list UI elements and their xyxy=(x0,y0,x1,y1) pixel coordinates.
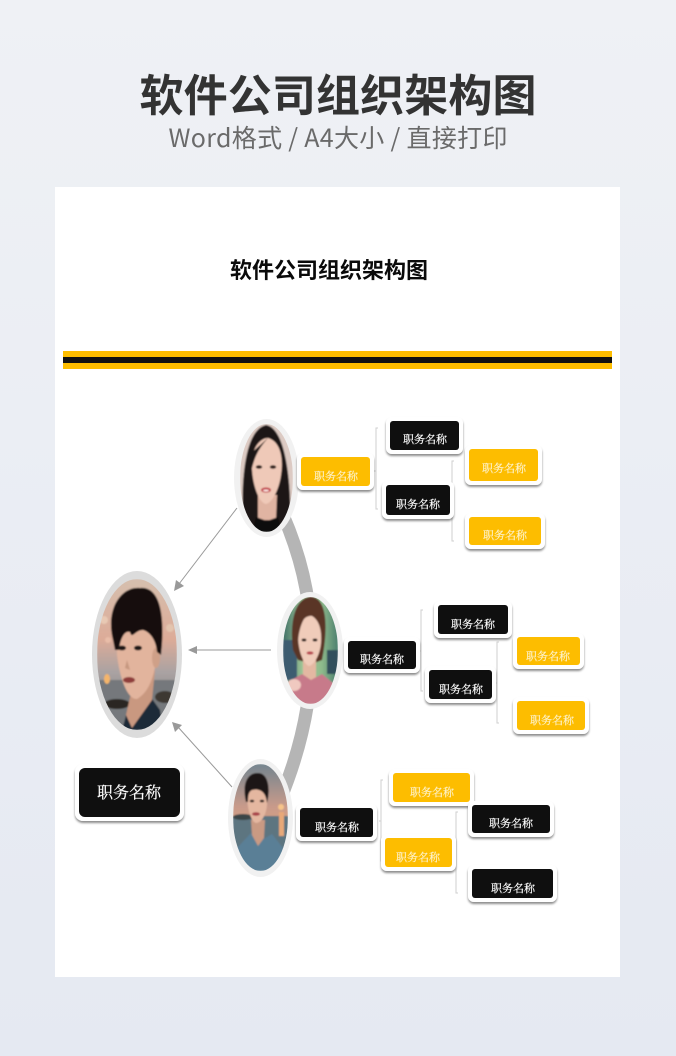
middle black box 2: 职务名称 xyxy=(439,682,484,696)
middle yellow box 1 xyxy=(513,633,584,669)
middle black box 1 xyxy=(434,601,512,638)
branch connector: bottom xyxy=(379,780,458,893)
top yellow box 1 xyxy=(465,445,542,485)
bottom yellow box 1: 职务名称 xyxy=(410,785,455,799)
portrait: lead xyxy=(92,571,182,738)
branch connector: middle xyxy=(419,610,499,723)
top yellow box 2 xyxy=(465,513,545,549)
subtitle: Word格式 / A4大小 / 直接打印 xyxy=(168,119,508,155)
bottom yellow box 1 xyxy=(389,769,474,806)
middle black box 2 xyxy=(425,666,496,703)
branch connector: top xyxy=(374,428,454,541)
bottom yellow box 2: 职务名称 xyxy=(396,850,441,864)
bottom black box 1: 职务名称 xyxy=(489,816,534,830)
middle main box: 职务名称 xyxy=(360,652,405,666)
bottom main box xyxy=(296,804,377,841)
top yellow box 1: 职务名称 xyxy=(482,461,527,475)
portrait: top person xyxy=(234,419,299,537)
document heading: 软件公司组织架构图 xyxy=(230,258,428,283)
portrait: middle person xyxy=(277,592,343,709)
top branch boxes xyxy=(297,417,545,549)
bottom black box 2 xyxy=(468,865,557,902)
middle yellow box 2: 职务名称 xyxy=(530,713,575,727)
arrow: middle person to lead xyxy=(188,646,271,654)
middle yellow box 1: 职务名称 xyxy=(526,649,571,663)
lead title box: 职务名称 xyxy=(97,784,162,802)
top yellow box 2: 职务名称 xyxy=(483,528,528,542)
top black box 2 xyxy=(382,481,454,519)
bottom black box 2: 职务名称 xyxy=(491,881,536,895)
top main box: 职务名称 xyxy=(314,469,359,483)
top black box 1: 职务名称 xyxy=(403,432,448,446)
middle branch boxes xyxy=(344,601,589,734)
bottom main box: 职务名称 xyxy=(315,820,360,834)
header stripe xyxy=(63,351,612,369)
middle yellow box 2 xyxy=(513,697,589,734)
bottom black box 1 xyxy=(468,801,554,837)
panel: document page xyxy=(55,187,620,977)
lead title box xyxy=(75,764,184,821)
portrait: bottom person xyxy=(228,759,293,877)
middle black box 1: 职务名称 xyxy=(451,617,496,631)
middle main box xyxy=(344,637,420,673)
top black box 1 xyxy=(386,417,463,454)
top main box xyxy=(297,453,374,490)
curved connector arc xyxy=(280,515,312,800)
arrow: top person to lead xyxy=(174,508,237,591)
arrow: bottom person to lead xyxy=(172,722,232,787)
bottom yellow box 2 xyxy=(381,834,456,871)
main title: 软件公司组织架构图 xyxy=(140,72,536,121)
top black box 2: 职务名称 xyxy=(396,497,441,511)
bottom branch boxes xyxy=(296,769,557,902)
